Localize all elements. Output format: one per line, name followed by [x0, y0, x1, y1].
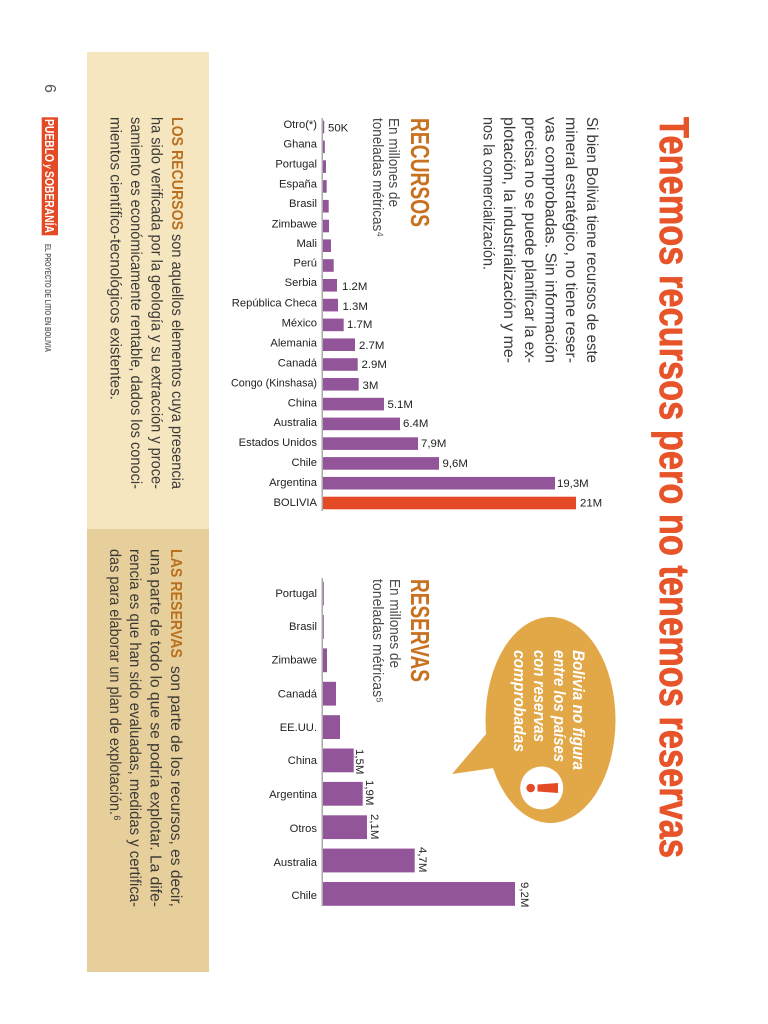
- bar chart: reservas: Otros: [290, 823, 317, 835]
- intro text block: [480, 117, 600, 363]
- intro text block: mineral estratégico, no tiene reser-: [562, 117, 579, 363]
- bar chart: recursos: 5.1M: [388, 399, 413, 411]
- bar chart: recursos: 3M: [362, 380, 378, 392]
- heading: reservas: RESERVAS: [405, 579, 435, 682]
- intro text block: plotación, la industrialización y me-: [500, 117, 517, 363]
- panel text: los recursos: son aquellos elementos cuya presencia: [168, 234, 185, 489]
- bar chart: recursos: 21M: [580, 498, 602, 510]
- bar chart: reservas: Chile: [292, 890, 317, 902]
- bar chart: recursos: Australia: [273, 417, 318, 429]
- bar chart: reservas: Australia: [273, 857, 318, 869]
- bar chart: recursos: Chile: [292, 457, 317, 469]
- bar chart: recursos: 19,3M: [557, 478, 589, 490]
- bar chart: recursos: 2.9M: [362, 359, 387, 371]
- bar chart: reservas: Argentina: [269, 789, 318, 801]
- panel text: los recursos: mientos científico-tecnológicos existentes.: [106, 117, 124, 400]
- icon: exclamation mark: [520, 766, 563, 810]
- bar chart: recursos: México: [282, 318, 317, 330]
- panel text: las reservas: LAS RESERVAS: [167, 549, 184, 658]
- bar chart: reservas: Portugal: [275, 588, 317, 600]
- intro text block: nos la comercialización.: [480, 117, 496, 270]
- bar chart: recursos: Perú: [293, 258, 317, 270]
- bar chart: recursos: España: [279, 178, 318, 190]
- bar chart: reservas: EE.UU.: [280, 722, 317, 734]
- heading: reservas: [369, 579, 435, 703]
- bar chart: recursos: 1.2M: [342, 281, 367, 293]
- bar chart: recursos: Alemania: [270, 338, 318, 350]
- heading: reservas: En millones de: [386, 579, 403, 668]
- bar chart: reservas: 4,7M: [416, 847, 428, 872]
- publication subtitle: EL PROYECTO DE LITIO EN BOLIVIA: [43, 244, 53, 352]
- bar chart: recursos: Otro(*): [283, 119, 317, 131]
- bar chart: recursos: [231, 118, 602, 511]
- bar chart: recursos: 9,6M: [442, 458, 468, 470]
- bar chart: recursos: BOLIVIA: [273, 497, 318, 509]
- bar chart: recursos: Brasil: [289, 198, 317, 210]
- panel text: las reservas: rencia es que han sido evaluadas, medidas y certifica-: [126, 549, 143, 907]
- bar chart: recursos: 2.7M: [359, 340, 384, 352]
- panel: los recursos: [87, 52, 209, 529]
- bar chart: recursos: Argentina: [269, 477, 318, 489]
- bar chart: recursos: 6.4M: [403, 418, 428, 430]
- bar chart: reservas: 9,2M: [518, 882, 530, 907]
- panel text: las reservas: [106, 549, 184, 907]
- heading: recursos: toneladas métricas⁴: [369, 118, 386, 237]
- callout text: comprobadas: [510, 650, 529, 752]
- panel text: las reservas: una parte de todo lo que se podría explotar. La dife-: [146, 549, 164, 907]
- bar chart: recursos: Mali: [296, 238, 317, 250]
- bar chart: reservas: Brasil: [289, 621, 317, 633]
- panel text: los recursos: [106, 117, 185, 489]
- bar chart: reservas: 1,9M: [363, 780, 375, 805]
- bar chart: recursos: Portugal: [275, 159, 317, 171]
- bar chart: reservas: 2,1M: [368, 814, 380, 839]
- bar chart: recursos: Serbia: [285, 277, 318, 289]
- bar chart: reservas: Canadá: [278, 689, 318, 701]
- bar chart: recursos: China: [288, 398, 318, 410]
- callout text: con reservas: [530, 650, 549, 742]
- bar chart: recursos: Canadá: [278, 358, 318, 370]
- heading: recursos: En millones de: [385, 118, 402, 207]
- bar chart: recursos: 7,9M: [421, 438, 446, 450]
- panel text: las reservas: das para elaborar un plan de explotación.⁶: [106, 549, 123, 821]
- callout text: entre los países: [550, 650, 569, 762]
- page number: 6: [41, 84, 58, 93]
- heading: recursos: RECURSOS: [405, 118, 435, 227]
- bar chart: recursos: República Checa: [232, 298, 318, 310]
- callout text: Bolivia no figura: [569, 650, 588, 770]
- intro text block: Si bien Bolivia tiene recursos de este: [583, 117, 600, 363]
- heading: reservas: toneladas métricas⁵: [369, 579, 386, 703]
- bar chart: recursos: 50K: [328, 122, 349, 134]
- intro text block: vas comprobadas. Sin información: [542, 117, 558, 363]
- bar chart: reservas: 1,5M: [353, 749, 365, 774]
- bar chart: recursos: Estados Unidos: [239, 437, 317, 449]
- intro text block: precisa no se puede planificar la ex-: [521, 117, 538, 363]
- panel text: los recursos: LOS RECURSOS: [168, 117, 185, 230]
- bar chart: reservas: [269, 578, 530, 907]
- bar chart: reservas: China: [288, 755, 318, 767]
- bar chart: recursos: 1.3M: [342, 301, 368, 313]
- panel text: los recursos: ha sido verificada por la geología y su extracción y proce-: [148, 117, 164, 489]
- bar chart: recursos: Congo (Kinshasa): [231, 378, 317, 390]
- bar chart: recursos: 1.7M: [347, 319, 372, 331]
- panel: las reservas: [87, 529, 209, 972]
- panel text: los recursos: samiento es económicamente rentable, dados los conoci-: [127, 117, 144, 489]
- bar chart: recursos: Zimbawe: [272, 218, 317, 230]
- bar chart: reservas: Zimbawe: [272, 655, 317, 667]
- panel text: las reservas: son parte de los recursos, es decir,: [167, 666, 184, 907]
- callout: speech bubble: [452, 617, 616, 823]
- heading: recursos: [369, 118, 435, 237]
- callout text: [510, 650, 588, 770]
- logo: pueblo y soberania: PUEBLO y SOBERANÍA: [42, 119, 57, 233]
- title: Tenemos recursos pero no tenemos reservas: [651, 117, 698, 858]
- bar chart: recursos: Ghana: [283, 139, 318, 151]
